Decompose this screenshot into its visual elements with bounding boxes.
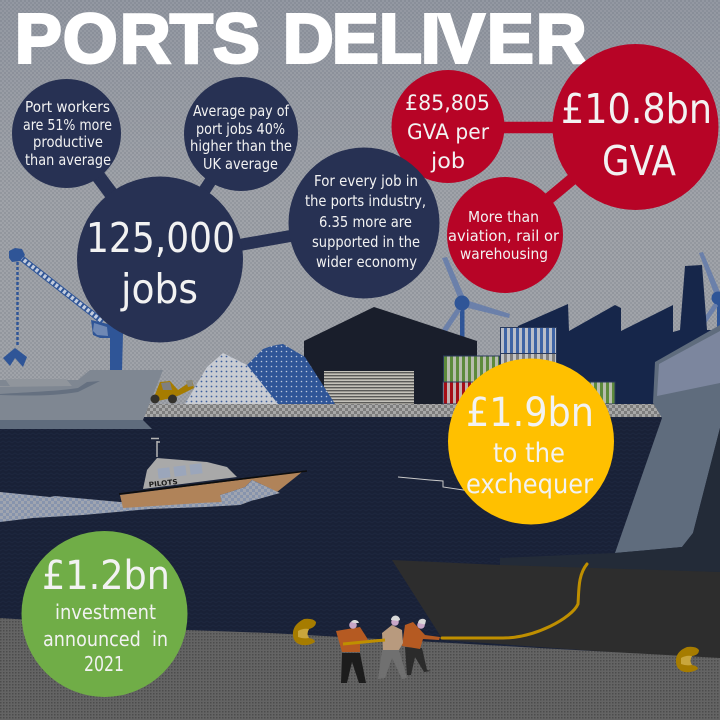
stat: 125,000 jobs: 125,000 [86,214,235,262]
wake foam [0,492,262,522]
worker 1 [336,620,368,683]
callout: wider economy [288,148,440,298]
callout: productivity: productive [33,133,103,151]
ground [0,618,720,720]
callout: pay: port jobs 40% [196,120,285,138]
stat: investment: announced in [43,627,168,651]
panel: GVA bubbles [392,44,718,293]
callout: comparison: warehousing [460,245,548,263]
icon: wind turbine left [441,257,510,337]
callout: comparison: More than [468,208,539,226]
callout: productivity [12,79,121,188]
title: PORTS DELIVER [15,0,587,78]
rope [442,564,587,638]
callout: pay: Average pay of [193,102,290,120]
callout: comparison [447,177,563,293]
stat: 125,000 jobs: jobs [120,265,198,313]
callout: pay [184,77,298,191]
stat: 10.8bn GVA: GVA [602,137,676,185]
icon: wind turbine right [690,252,720,339]
callout: productivity: are 51% more [23,116,112,134]
callout: pay: higher than the [190,137,292,155]
pilot boat: PILOTS [148,478,178,489]
callout: productivity: than average [25,151,111,169]
icon: crane [3,248,123,372]
callout: wider economy: 6.35 more are [319,213,412,231]
stat: exchequer: exchequer [466,469,594,500]
water [0,417,720,657]
small wake line [398,477,470,491]
connectors [66,133,364,259]
aggregate heaps [185,344,335,404]
stat: 125,000 jobs [77,176,243,342]
stat: investment: 2021 [84,652,124,676]
icon: excavator [150,380,194,404]
icon: bollard left [293,619,316,645]
dark hull [392,560,720,660]
callout: wider economy: supported in the [312,233,420,251]
stat: 10.8bn GVA [552,44,718,210]
callout: pay: UK average [203,155,278,173]
warehouse [304,307,477,404]
quay [143,404,664,417]
connectors [448,127,635,235]
icon: bollard right [676,647,699,672]
worker 2 [378,616,407,679]
stat: exchequer: £1.9bn [466,390,594,436]
ship left [0,370,163,429]
stat: investment: £1.2bn [42,553,170,599]
callout: wider economy: wider economy [316,253,417,271]
stat: GVA per job [392,70,504,183]
ship right [500,325,720,572]
pilot boat [119,438,307,508]
stat: GVA per job: GVA per [407,120,489,145]
harbour scene [0,248,720,720]
stat: exchequer: to the [493,438,565,469]
workers pulling rope [336,616,440,683]
callout: comparison: aviation, rail or [448,227,560,245]
stat: GVA per job: job [430,149,465,174]
stat: investment: investment [55,600,156,624]
callout: productivity: Port workers [25,98,110,116]
worker 3 [402,619,440,675]
callout: wider economy: the ports industry, [305,192,426,210]
stat: exchequer [448,358,614,524]
panel: jobs bubbles [12,77,364,342]
shipping containers [443,328,615,404]
factory silhouette [500,265,720,404]
stat: investment [22,531,188,697]
callout: wider economy: For every job in [314,172,418,190]
stat: GVA per job: £85,805 [405,91,490,116]
